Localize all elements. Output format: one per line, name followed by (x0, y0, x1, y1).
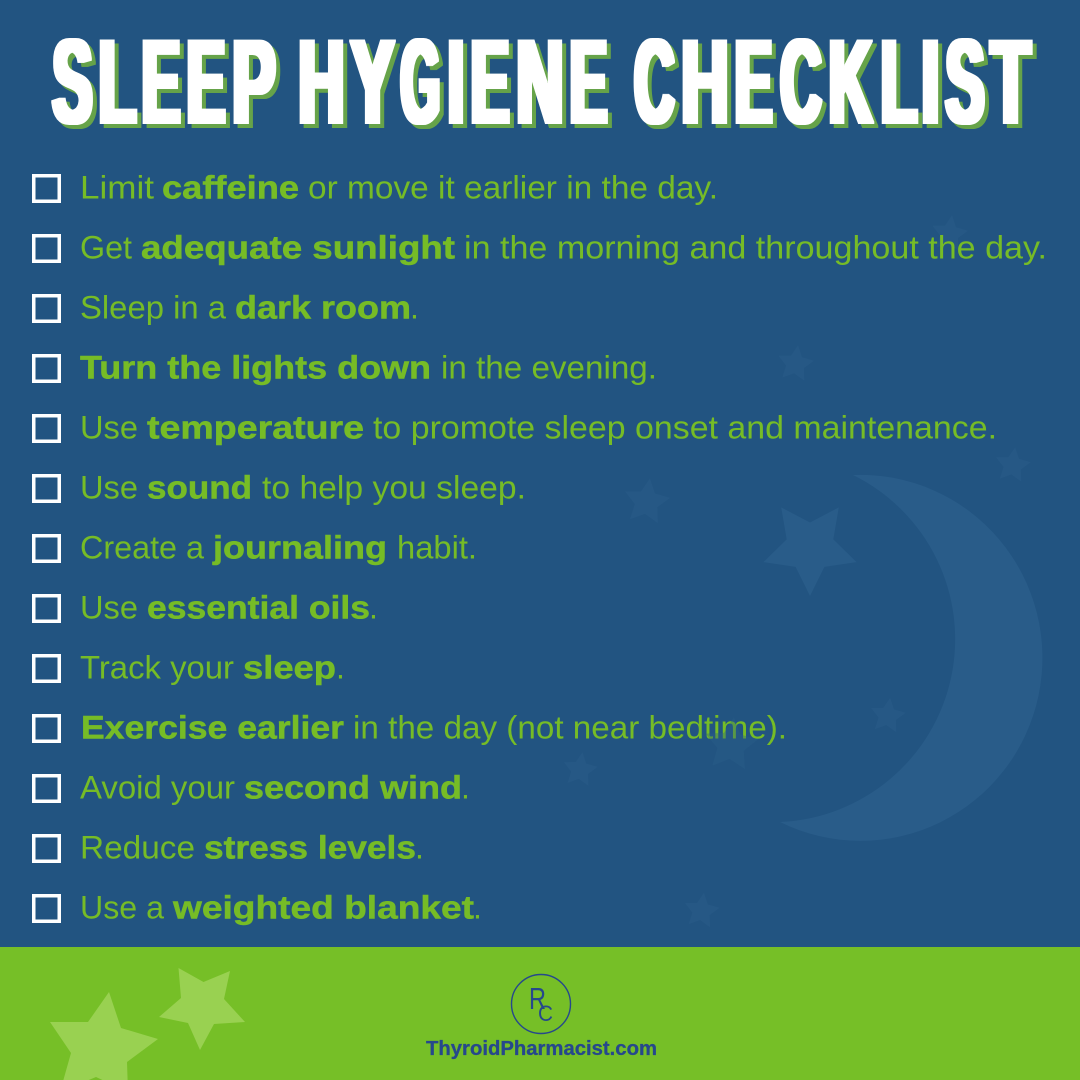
logo monogram (512, 974, 570, 1034)
item: sunlight: adequate sunlight (141, 230, 455, 266)
item: sound: to help you sleep. (262, 470, 526, 506)
item: journaling: journaling (212, 530, 387, 566)
item: sunlight: Get (80, 230, 132, 266)
title: L (881, 16, 917, 149)
item: stress: stress levels (204, 830, 416, 866)
item: temperature: Use (80, 410, 138, 446)
item: dark room: dark room (235, 290, 411, 326)
item: caffeine: or move it earlier in the day. (308, 170, 718, 206)
star overlapping text (702, 714, 760, 770)
icon: crescent moon (780, 475, 1042, 841)
title: C (780, 16, 821, 149)
title: I (448, 16, 464, 149)
item: temperature (34, 410, 997, 446)
icon: star (775, 343, 816, 382)
logo monogram: C (538, 1001, 553, 1026)
icon: star (621, 475, 673, 524)
item: dark room (34, 290, 419, 326)
item: caffeine (34, 170, 718, 206)
item: lights down: Turn the lights down (80, 350, 431, 386)
item: second wind: . (461, 770, 470, 806)
icon: star (993, 445, 1033, 483)
item: journaling: habit. (397, 530, 477, 566)
item: stress: . (415, 830, 424, 866)
item: lights down: in the evening. (441, 350, 657, 386)
icon: star (682, 890, 721, 928)
logo monogram: R (529, 981, 546, 1016)
title: H (681, 16, 729, 149)
title: T (991, 16, 1030, 149)
title: I (921, 16, 940, 149)
title: E (142, 16, 180, 149)
title: Y (351, 16, 394, 149)
checklist (34, 170, 1047, 926)
title: E (471, 16, 509, 149)
item: caffeine: caffeine (162, 170, 299, 206)
item: weighted blanket: Use a (80, 890, 164, 926)
logo (426, 974, 657, 1060)
item: dark room: Sleep in a (80, 290, 226, 326)
item: essential oils (34, 590, 378, 626)
item: temperature: to promote sleep onset and maintenance. (373, 410, 997, 446)
item: caffeine: Limit (80, 170, 154, 206)
item: journaling (34, 530, 477, 566)
icon: footer star small (159, 968, 245, 1050)
item: dark room: . (410, 290, 419, 326)
item: exercise: Exercise earlier (81, 710, 344, 746)
item: sound: Use (80, 470, 138, 506)
title: G (401, 16, 440, 149)
item: temperature: temperature (147, 410, 364, 446)
item: track sleep (34, 650, 345, 686)
item: exercise (34, 710, 787, 746)
title: E (570, 16, 607, 149)
icon: star (561, 750, 599, 787)
item: essential oils: . (369, 590, 378, 626)
item: sunlight: in the morning and throughout the day. (464, 230, 1047, 266)
icon: star (868, 695, 908, 733)
item: weighted blanket: weighted blanket (172, 890, 474, 926)
title (52, 16, 1030, 149)
item: track sleep: . (336, 650, 345, 686)
item: lights down (34, 350, 657, 386)
item: exercise: in the day (not near bedtime). (353, 710, 787, 746)
title: S (52, 16, 92, 149)
item: sound (34, 470, 526, 506)
title: N (516, 16, 564, 149)
item: second wind: Avoid your (80, 770, 235, 806)
title: E (735, 16, 772, 149)
item: stress: Reduce (80, 830, 195, 866)
item: sunlight (34, 230, 1047, 266)
item: journaling: Create a (80, 530, 204, 566)
website address: ThyroidPharmacist.com (426, 1037, 657, 1060)
item: essential oils: essential oils (147, 590, 370, 626)
title: L (99, 16, 136, 149)
item: stress (34, 830, 424, 866)
title: K (829, 16, 872, 149)
title: E (187, 16, 225, 149)
item: sound: sound (147, 470, 252, 506)
icon: footer star large (50, 992, 158, 1080)
item: second wind (34, 770, 470, 806)
title: C (634, 16, 674, 149)
decorative moon and stars (561, 213, 1042, 928)
icon: star (929, 213, 970, 252)
icon: star (702, 714, 760, 770)
item: track sleep: Track your (80, 650, 234, 686)
item: second wind: second wind (244, 770, 462, 806)
title: P (232, 16, 276, 149)
item: track sleep: sleep (243, 650, 336, 686)
title: S (946, 16, 984, 149)
item: weighted blanket (34, 890, 482, 926)
icon: large star (763, 507, 857, 596)
footer band (0, 947, 1080, 1080)
item: essential oils: Use (80, 590, 138, 626)
item: weighted blanket: . (473, 890, 482, 926)
title: H (298, 16, 344, 149)
